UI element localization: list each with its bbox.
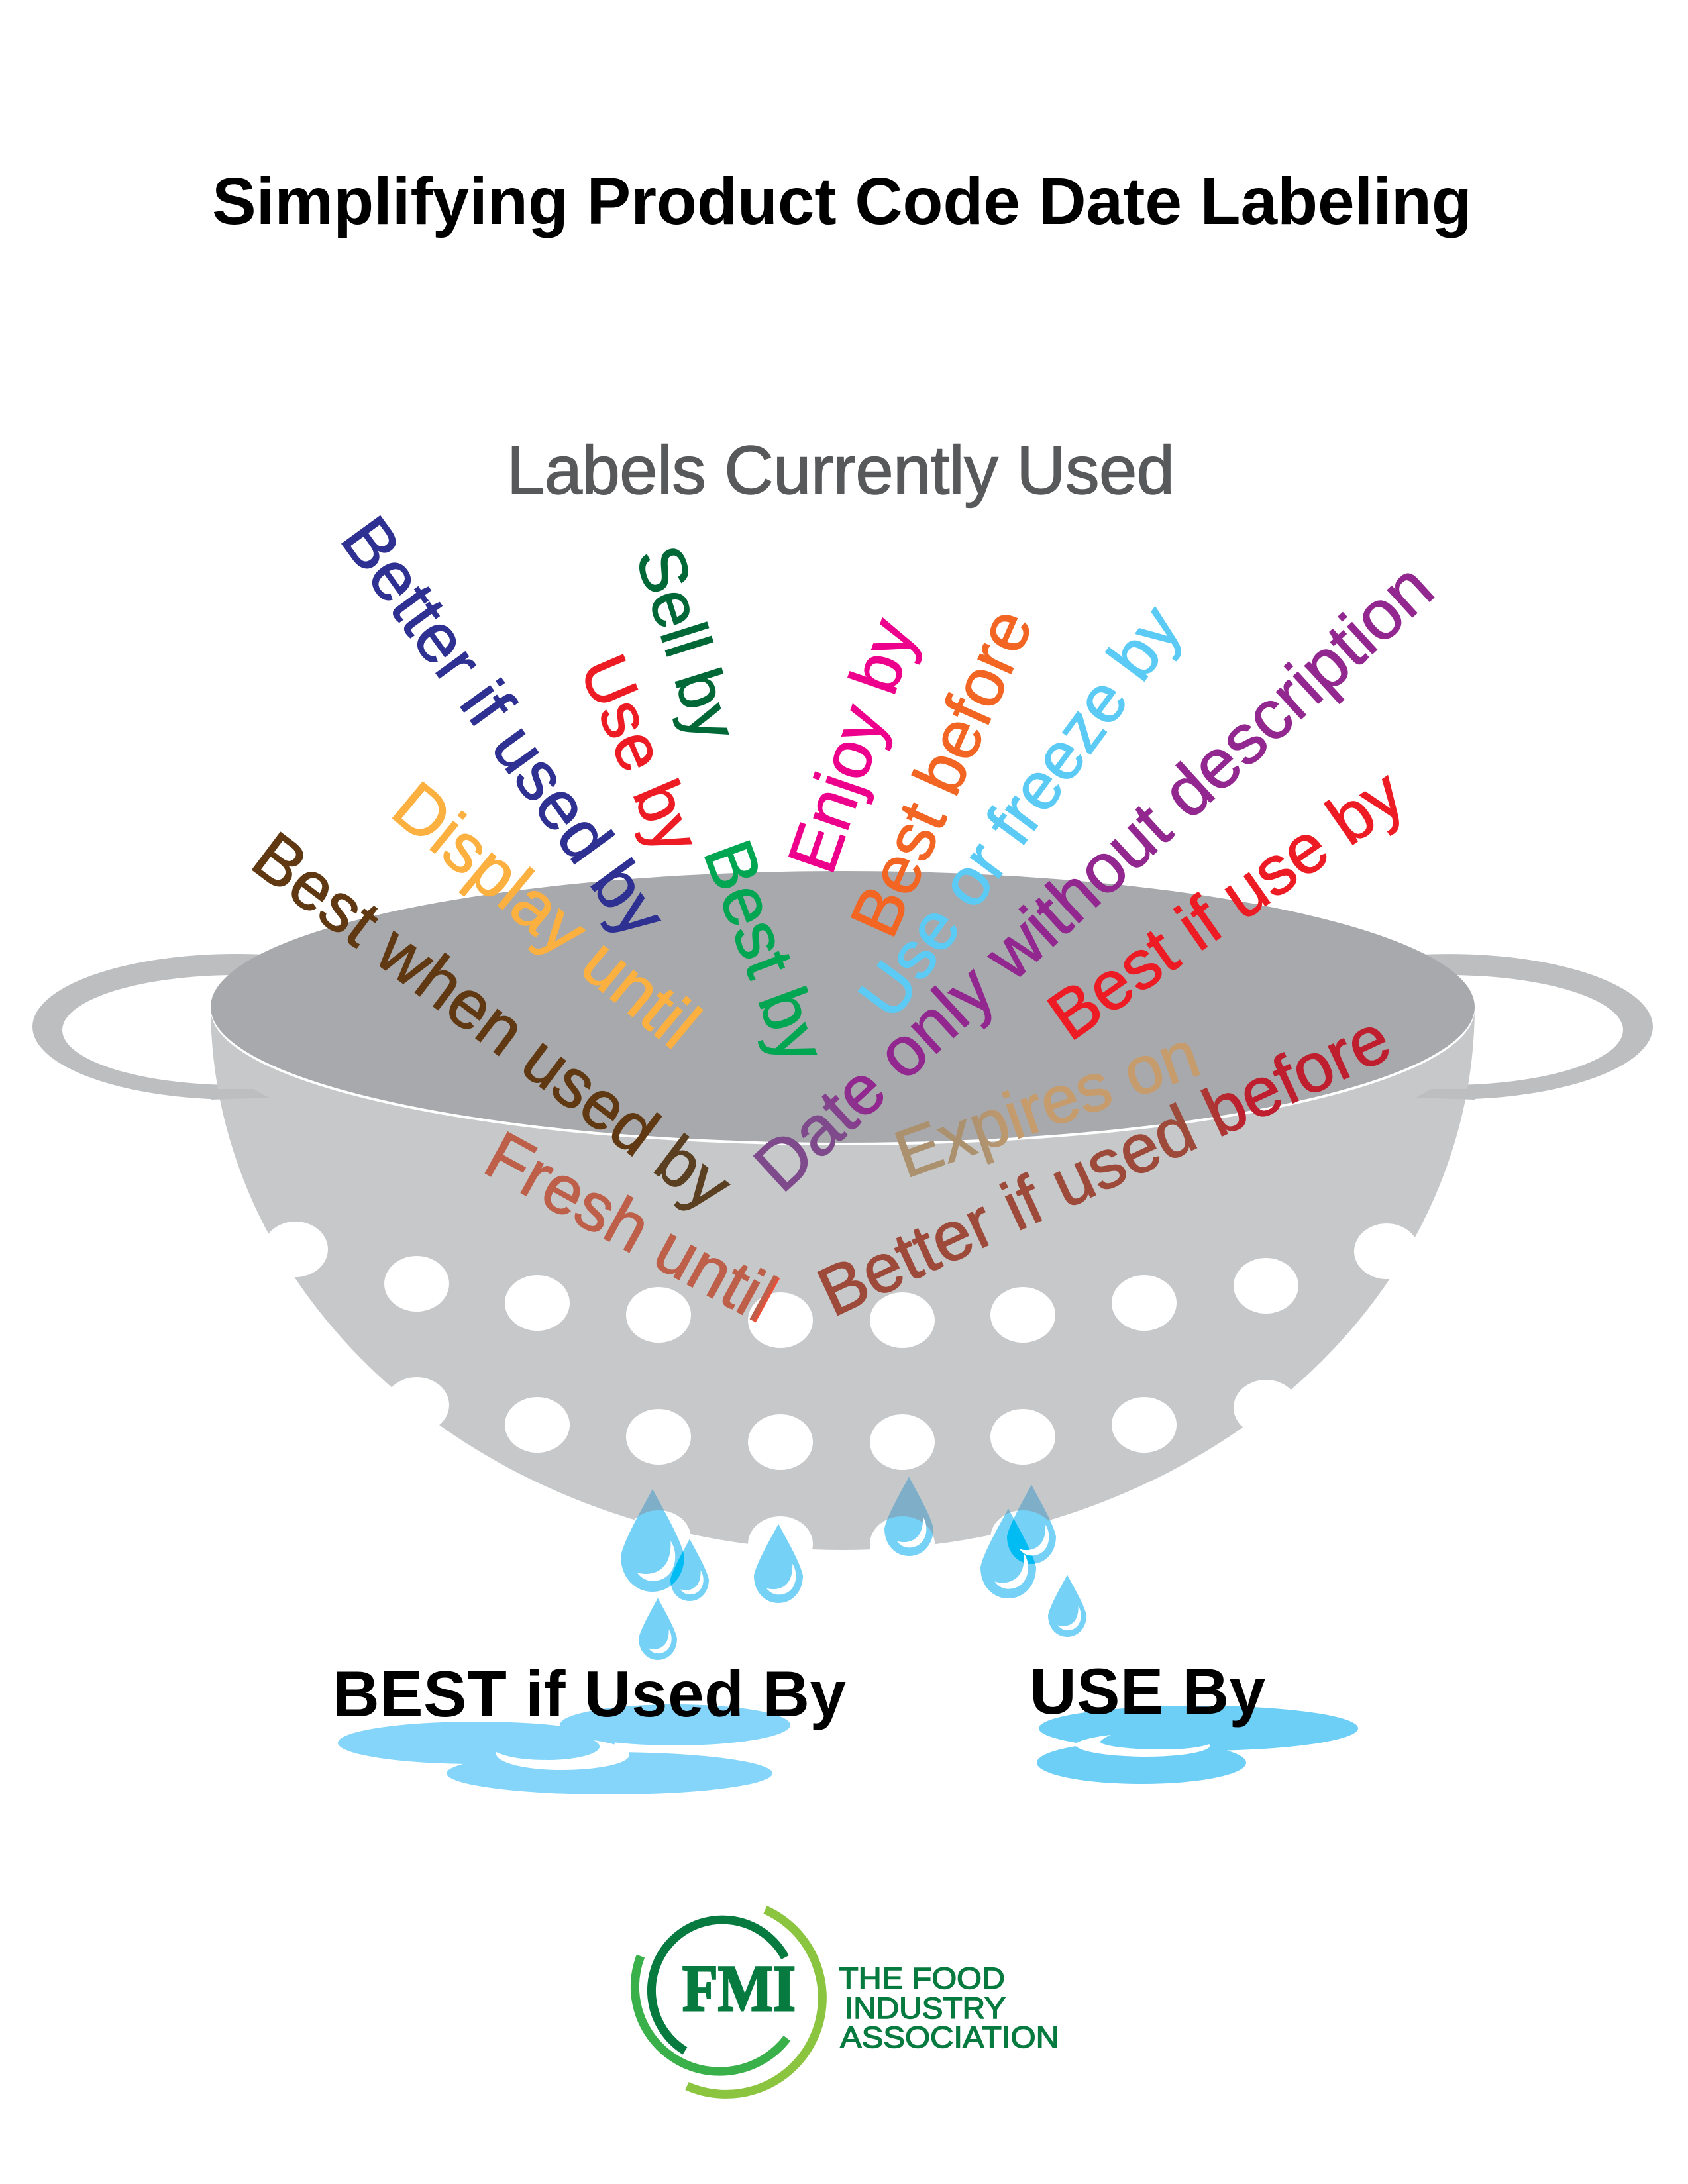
heading: USE By: USE By: [1029, 1655, 1265, 1728]
colander bowl: [211, 1007, 1475, 1550]
label: Use or freeze by: Use or freeze by: [845, 592, 1196, 1031]
left handle joint: [211, 1089, 269, 1100]
left handle: [32, 954, 441, 1100]
overlap of drops 1 and 2: [670, 1551, 684, 1586]
logo ring: dark green: [651, 1920, 785, 2051]
drop 3: [754, 1524, 803, 1603]
drop 7: [1007, 1484, 1056, 1564]
drop 8: [1048, 1575, 1086, 1637]
drop highlights: [637, 1517, 1081, 1653]
rim highlight: [211, 874, 1475, 1145]
logo wordmark FMI: FMI: [682, 1951, 796, 2025]
drop 4: [639, 1598, 677, 1660]
label: Enjoy by: Enjoy by: [773, 609, 931, 882]
title: Simplifying Product Code Date Labeling: [212, 164, 1472, 238]
colander opening: [211, 871, 1475, 1143]
label: Best if use by: Best if use by: [1035, 755, 1418, 1055]
subheading: labels currently used: Labels Currently Used: [507, 432, 1175, 508]
logo text line 2: INDUSTRY: [845, 1991, 1006, 2025]
logo text line 1: THE FOOD: [839, 1961, 1005, 1995]
logo ring: light green: [687, 1910, 822, 2094]
FMI logo: [635, 1910, 1059, 2094]
label: Use by: Use by: [566, 645, 714, 863]
right handle: [1245, 954, 1653, 1100]
right handle joint: [1416, 1089, 1475, 1100]
drop 1: [621, 1489, 684, 1592]
puddle: use by: [1037, 1706, 1358, 1784]
drop tips seen over the colander: [637, 1477, 1050, 1535]
label: Date only without description: Date only without description: [739, 548, 1448, 1206]
label: Best when used by: Best when used by: [239, 817, 745, 1225]
label: Better if used by: Better if used by: [326, 503, 681, 951]
water drops: [621, 1477, 1086, 1660]
label: Better if used before: Better if used before: [807, 1000, 1402, 1331]
logo ring: mid green: [635, 1956, 787, 2071]
logo text line 3: ASSOCIATION: [840, 2020, 1059, 2054]
heading: BEST if Used By: BEST if Used By: [333, 1657, 846, 1730]
drop 2: [670, 1539, 709, 1601]
label: Sell by: Sell by: [621, 537, 752, 749]
label: Best by: Best by: [688, 831, 841, 1072]
label: Expires on: Expires on: [886, 1017, 1208, 1192]
drop 6: [980, 1508, 1036, 1598]
label: Best before: Best before: [835, 598, 1047, 947]
puddle: best if used by: [338, 1704, 790, 1794]
colander holes: [263, 1222, 1419, 1572]
label: Fresh until: Fresh until: [473, 1117, 789, 1337]
label: Display until: Display until: [378, 767, 713, 1063]
overlap of drops 6 and 7: [1007, 1518, 1035, 1564]
drop 5: [884, 1477, 933, 1556]
colander illustration: [32, 871, 1653, 1572]
